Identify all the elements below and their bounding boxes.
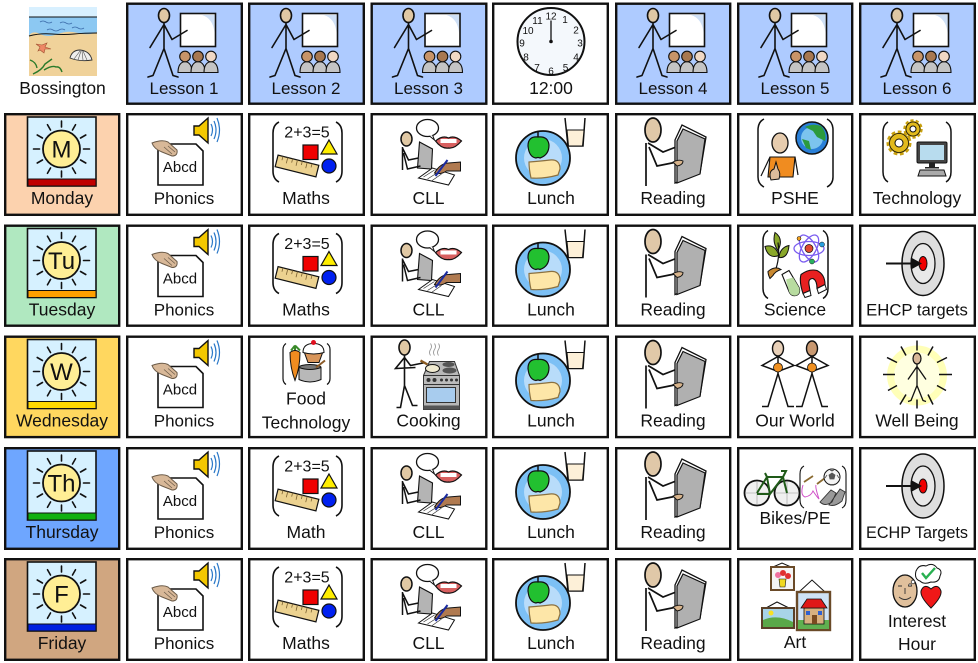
label: Interest Hour: Interest: [888, 611, 946, 631]
icon: teacher and class: [148, 8, 218, 77]
label: CLL: CLL: [412, 633, 445, 653]
icon: maths shapes: 2+3=5: [284, 458, 330, 476]
Thursday: ECHP Targets: [860, 448, 975, 549]
label: Bikes/PE: Bikes/PE: [760, 508, 830, 528]
icon: speaking and writing: [401, 454, 462, 519]
row: Wednesday day card: [5, 337, 119, 437]
Friday: CLL: [372, 559, 486, 660]
Friday: Reading: [616, 559, 730, 660]
label: CLL: CLL: [412, 188, 445, 208]
icon: face, thought and heart: [893, 564, 941, 608]
header: Bossington picture and label: [19, 7, 106, 98]
label: Technology: Technology: [873, 188, 962, 208]
label: PSHE: PSHE: [771, 188, 819, 208]
label: Friday: Friday: [38, 633, 87, 653]
icon: carrot, cupcake and pot: [283, 340, 330, 384]
Thursday: CLL: [372, 448, 486, 549]
Thursday: Lunch: [493, 448, 608, 549]
label: Lunch: Lunch: [527, 522, 575, 542]
label: CLL: CLL: [412, 522, 445, 542]
label: Lunch: Lunch: [527, 300, 575, 320]
label: Food Technology: [262, 388, 351, 432]
Monday: CLL: [372, 114, 486, 215]
Friday: Interest Hour: [860, 559, 975, 660]
icon: phonics card: Abcd: [163, 493, 197, 510]
Tuesday: Lunch: [493, 226, 608, 326]
label: Art: Art: [784, 632, 806, 652]
label: Science: Science: [764, 300, 826, 320]
icon: teacher and class: [881, 8, 951, 77]
label: Math: Math: [287, 522, 325, 542]
Friday: Lunch: [493, 559, 608, 660]
label: Lesson 5: Lesson 5: [760, 79, 830, 98]
label: Wednesday: Wednesday: [16, 410, 108, 430]
Friday: Phonics: [127, 559, 242, 660]
header: Lesson 5: [738, 4, 852, 104]
icon: clock at twelve: 1: [562, 15, 568, 26]
Wednesday: Phonics: [127, 337, 242, 437]
Wednesday: Our World: [738, 337, 852, 437]
header: Lesson 1: [127, 4, 242, 104]
Wednesday: Reading: [616, 337, 730, 437]
label: ECHP Targets: ECHP Targets: [866, 524, 968, 542]
icon: speaking and writing: [401, 231, 462, 296]
Monday: Phonics: [127, 114, 242, 215]
Friday: Maths: [249, 559, 364, 660]
icon: phonics card: Abcd: [163, 270, 197, 288]
icon: clock at twelve: 7: [534, 63, 540, 74]
icon: clock at twelve: 5: [563, 63, 569, 74]
icon: teacher and class: [759, 8, 829, 77]
icon: person reading: [645, 563, 706, 631]
icon: person and globe: [758, 119, 833, 187]
icon: speaking and writing: [401, 564, 462, 630]
Tuesday: CLL: [372, 226, 486, 326]
icon: plant, atom, test tube, magnet: [763, 230, 828, 298]
icon: person reading: [645, 230, 706, 298]
label: Cooking: Cooking: [396, 410, 461, 430]
label: Food Technology: Technology: [262, 412, 351, 432]
label: Reading: Reading: [640, 300, 706, 320]
label: Maths: Maths: [282, 188, 330, 208]
icon: phonics card: Abcd: [163, 604, 197, 621]
icon: person reading: [645, 340, 706, 408]
Monday: PSHE: [738, 114, 852, 215]
icon: maths shapes: 2+3=5: [284, 124, 330, 142]
icon: sun with Th: Th: [47, 470, 76, 498]
Thursday: Math: [249, 448, 364, 549]
icon: lunch plate and drink: [516, 230, 585, 296]
label: Lunch: Lunch: [527, 410, 575, 430]
icon: bike and PE kit: [744, 466, 846, 508]
Wednesday: Cooking: [372, 337, 486, 437]
label: Monday: Monday: [31, 188, 93, 208]
label: Thursday: Thursday: [26, 522, 99, 542]
label: Lesson 1: Lesson 1: [150, 79, 218, 98]
icon: teacher and class: [637, 8, 707, 77]
label: EHCP targets: EHCP targets: [866, 300, 968, 320]
icon: clock at twelve: [518, 8, 584, 78]
icon: beach scene: [29, 7, 97, 76]
header: Lesson 2: [249, 4, 364, 104]
label: Reading: Reading: [640, 410, 706, 430]
Friday: Art: [738, 559, 852, 660]
Thursday: Reading: [616, 448, 730, 549]
icon: teacher and class: [392, 8, 462, 77]
label: Interest Hour: Hour: [898, 634, 936, 654]
Monday: Maths: [249, 114, 364, 215]
Wednesday: Food Technology: [249, 337, 364, 437]
label: Reading: Reading: [640, 522, 706, 542]
icon: lunch plate and drink: [516, 340, 585, 408]
icon: phonics card: Abcd: [163, 159, 197, 176]
icon: teacher and class: [270, 8, 340, 77]
Thursday: Bikes/PE: [738, 448, 852, 549]
icon: person reading: [645, 452, 706, 520]
label: Phonics: Phonics: [154, 412, 214, 430]
Tuesday: Maths: [249, 226, 364, 326]
label: Lesson 3: Lesson 3: [394, 79, 463, 98]
header: 12:00 clock: [493, 4, 608, 104]
icon: lunch plate and drink: [516, 452, 585, 519]
icon: two people: [762, 341, 828, 406]
label: Lunch: Lunch: [527, 633, 575, 653]
icon: sun with Tu: Tu: [48, 248, 75, 275]
icon: sun with M: M: [52, 136, 72, 164]
label: Reading: Reading: [640, 633, 706, 653]
label: 12:00: 12:00: [529, 78, 573, 98]
label: Phonics: Phonics: [154, 523, 214, 542]
label: CLL: CLL: [412, 300, 445, 320]
Monday: Lunch: [493, 114, 608, 215]
icon: clock at twelve: 2: [573, 26, 579, 36]
Monday: Reading: [616, 114, 730, 215]
header: Lesson 4: [616, 4, 730, 104]
icon: clock at twelve: 12: [545, 12, 557, 22]
label: Lesson 6: Lesson 6: [882, 79, 952, 98]
Tuesday: Reading: [616, 226, 730, 326]
label: Reading: Reading: [640, 188, 706, 208]
icon: maths shapes: 2+3=5: [284, 236, 330, 253]
label: Food Technology: Food: [286, 388, 326, 408]
Tuesday: Phonics: [127, 226, 242, 326]
row: Tuesday day card: [5, 226, 119, 326]
Thursday: Phonics: [127, 448, 242, 549]
label: Bossington: Bossington: [19, 78, 106, 98]
label: Phonics: Phonics: [154, 634, 214, 653]
label: Lesson 4: Lesson 4: [638, 79, 708, 98]
row: Monday day card: [5, 114, 119, 215]
icon: lunch plate and drink: [516, 118, 585, 185]
icon: speaking and writing: [401, 120, 462, 185]
Tuesday: Science: [738, 226, 852, 326]
label: Lesson 2: Lesson 2: [272, 79, 340, 98]
label: Interest Hour: [888, 611, 946, 654]
icon: lunch plate and drink: [516, 563, 585, 630]
icon: phonics card: Abcd: [163, 382, 197, 398]
icon: target with arrow: [886, 454, 944, 518]
icon: person cooking at stove: [396, 340, 460, 410]
row: Thursday day card: [5, 448, 119, 549]
icon: clock at twelve: 10: [522, 26, 534, 37]
icon: framed pictures: [762, 563, 830, 630]
icon: clock at twelve: 6: [548, 66, 554, 78]
icon: clock at twelve: 9: [519, 38, 525, 50]
icon: glowing figure: [883, 340, 952, 408]
Wednesday: Lunch: [493, 337, 608, 437]
icon: clock at twelve: 3: [577, 38, 583, 50]
Wednesday: Well Being: [860, 337, 975, 437]
row: Friday day card: [5, 559, 119, 660]
header: Lesson 6: [860, 4, 975, 104]
icon: sun with W: W: [50, 359, 73, 386]
label: Phonics: Phonics: [154, 189, 214, 208]
label: Our World: Our World: [755, 410, 835, 430]
Tuesday: EHCP targets: [860, 226, 975, 326]
label: Phonics: Phonics: [154, 300, 214, 320]
icon: clock at twelve: 8: [523, 52, 529, 64]
Monday: Technology: [860, 114, 975, 215]
label: Tuesday: Tuesday: [29, 300, 95, 320]
icon: person reading: [645, 118, 706, 186]
icon: target with arrow: [886, 232, 944, 296]
icon: clock at twelve: 11: [532, 16, 543, 27]
label: Maths: Maths: [282, 300, 330, 320]
icon: gears and computer: [883, 121, 951, 182]
label: Lunch: Lunch: [527, 188, 575, 208]
label: Maths: Maths: [282, 633, 330, 653]
icon: clock at twelve: 4: [573, 52, 579, 64]
label: Well Being: Well Being: [875, 410, 959, 430]
icon: sun with F: F: [54, 582, 69, 608]
header: Lesson 3: [372, 4, 486, 104]
icon: maths shapes: 2+3=5: [284, 570, 330, 586]
